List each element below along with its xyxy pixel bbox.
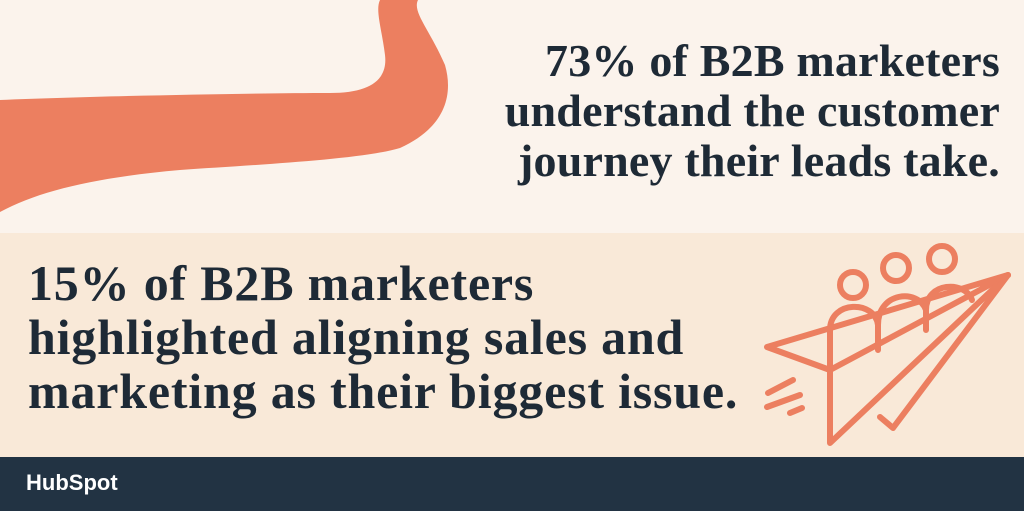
stat text: 15%: marketing as their biggest issue. [28, 363, 738, 419]
stat text: 73%: 73% of B2B marketers [545, 35, 1000, 86]
footer bar [0, 457, 1024, 511]
stat text: 73% [505, 35, 1000, 186]
stat text: 73%: journey their leads take. [518, 135, 1000, 186]
bottom panel [0, 233, 1024, 457]
logo: HubSpot: HubSpot [26, 470, 118, 495]
stat text: 15% [28, 255, 738, 419]
stat text: 15%: 15% of B2B marketers [28, 255, 534, 311]
icon: paper plane with people [764, 243, 1011, 446]
stat text: 15%: highlighted aligning sales and [28, 309, 684, 365]
decorative ribbon [0, 0, 448, 212]
stat text: 73%: understand the customer [505, 85, 1000, 136]
top panel [0, 0, 1024, 233]
